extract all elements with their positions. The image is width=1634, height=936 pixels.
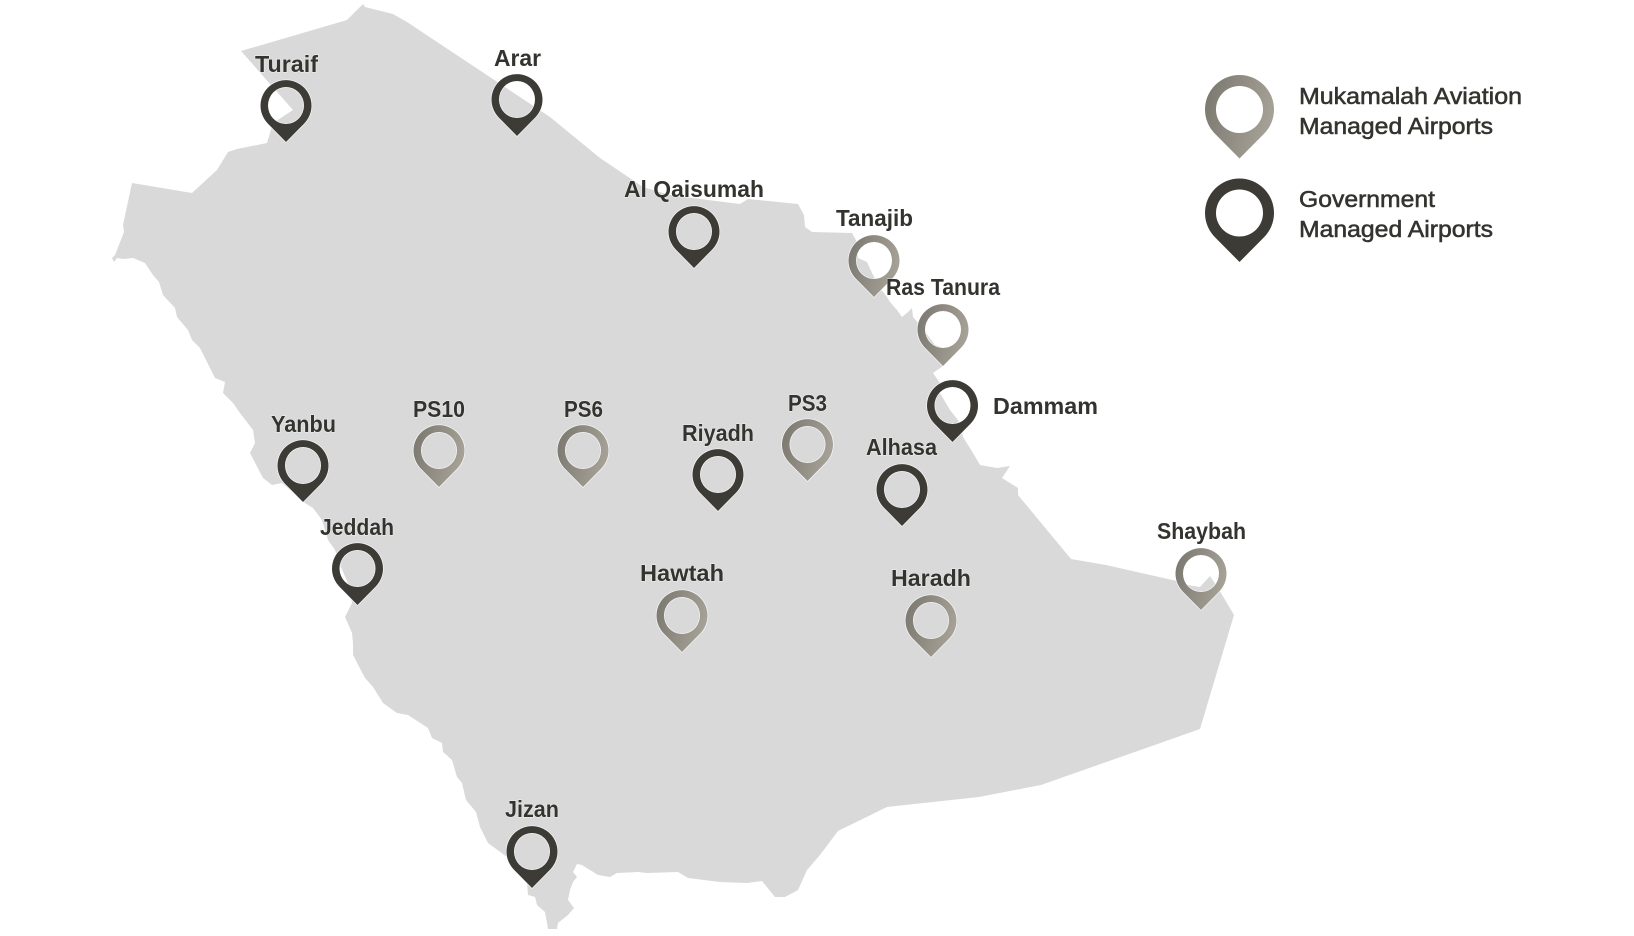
map: Saudi Arabia: [112, 4, 1234, 929]
airport: Hawtah: Hawtah: [640, 560, 724, 586]
airport: Tanajib: [836, 205, 913, 297]
airport: PS3: [782, 390, 833, 481]
airport: Arar: [492, 45, 542, 136]
airport: Jizan: Jizan: [505, 796, 559, 822]
airport: Tanajib: Tanajib: [836, 205, 913, 231]
airport: PS6: [558, 396, 608, 487]
airport: Alhasa: Alhasa: [866, 434, 937, 460]
legend: [1205, 75, 1522, 262]
legend item: Mukamalah Aviation Managed Airports: [1205, 75, 1522, 158]
airport: Hawtah: [640, 560, 724, 652]
legend item: Mukamalah Aviation Managed Airports: Managed Airports: [1299, 113, 1493, 139]
airport: Shaybah: Shaybah: [1157, 518, 1246, 544]
airport: Haradh: Haradh: [891, 565, 971, 591]
legend item: Government Managed Airports: Managed Airports: [1299, 216, 1493, 242]
airport: PS10: PS10: [413, 396, 465, 422]
airport: Al Qaisumah: Al Qaisumah: [624, 176, 764, 202]
legend item: Government Managed Airports: Government: [1299, 186, 1436, 212]
airport: Jeddah: [320, 514, 394, 605]
airport: PS10: [413, 396, 465, 487]
airport: Al Qaisumah: [624, 176, 764, 268]
airport: Riyadh: Riyadh: [682, 420, 754, 446]
airport: Riyadh: [682, 420, 754, 511]
airport: Yanbu: Yanbu: [271, 411, 336, 437]
airport: Yanbu: [271, 411, 336, 502]
airport: PS3: PS3: [788, 390, 827, 416]
airport: Haradh: [891, 565, 971, 657]
legend item: Mukamalah Aviation Managed Airports: Mukamalah Aviation: [1299, 83, 1522, 109]
airport: Dammam: Dammam: [993, 393, 1098, 419]
airport: Jizan: [505, 796, 559, 888]
airport: Turaif: Turaif: [255, 51, 318, 77]
airport: Ras Tanura: [886, 274, 1000, 366]
airport: Shaybah: [1157, 518, 1246, 610]
airport: Ras Tanura: Ras Tanura: [886, 274, 1000, 300]
airport: Alhasa: [866, 434, 937, 526]
airport: PS6: PS6: [564, 396, 603, 422]
airport: Jeddah: Jeddah: [320, 514, 394, 540]
airport: Dammam: [927, 380, 1098, 442]
airport: Arar: Arar: [494, 45, 541, 71]
airport: Turaif: [255, 51, 318, 142]
legend item: Government Managed Airports: [1205, 179, 1493, 262]
